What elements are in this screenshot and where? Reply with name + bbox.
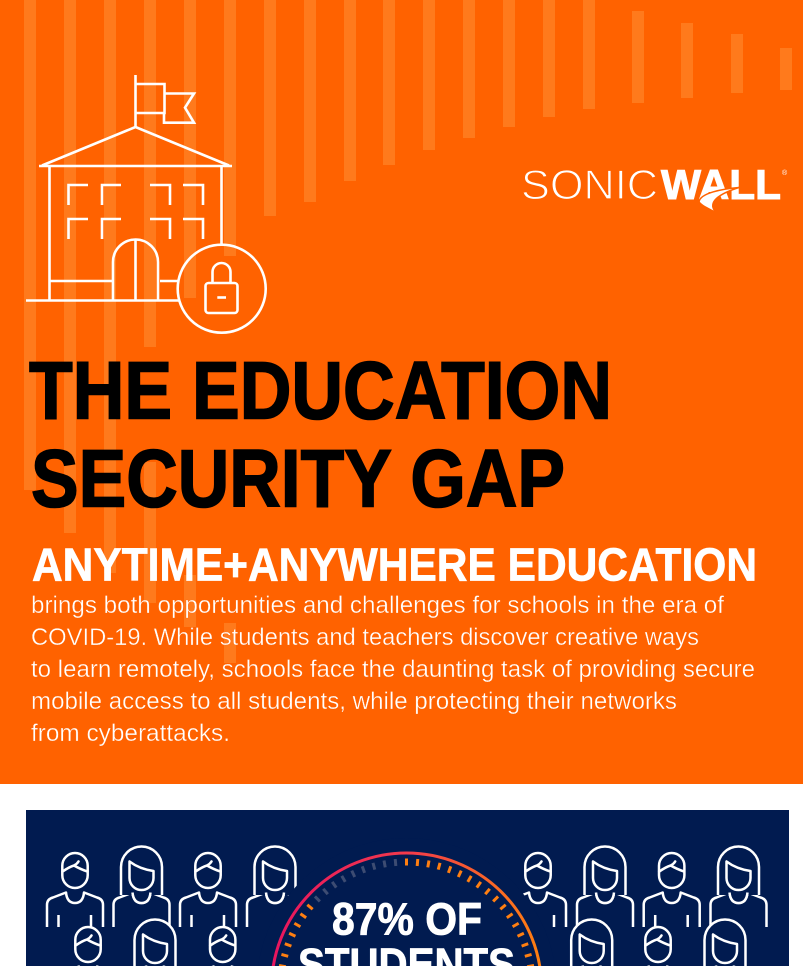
logo: SonicWall — [521, 161, 788, 212]
title — [29, 346, 612, 524]
logo: SonicWall: WALL — [661, 161, 781, 208]
intro text block: to learn remotely, schools face the daunting task of providing secure — [31, 656, 755, 683]
icon: school building with padlock — [26, 75, 266, 333]
intro text block: COVID-19. While students and teachers discover creative ways — [31, 624, 699, 651]
icons: students top row — [47, 847, 766, 927]
panel background — [26, 810, 789, 966]
circle backdrop — [288, 886, 524, 927]
decorative bars — [24, 0, 792, 663]
panel: navy student statistic — [26, 810, 789, 966]
icons: students second row — [60, 920, 753, 966]
logo: SonicWall: SONIC — [521, 161, 658, 208]
gauge ring — [272, 853, 542, 966]
statistic text — [300, 902, 514, 966]
title: SECURITY GAP — [31, 434, 565, 524]
intro text block: brings both opportunities and challenges for schools in the era of — [31, 592, 724, 619]
intro text block: mobile access to all students, while protecting their networks — [31, 688, 677, 715]
intro text block — [31, 592, 755, 747]
statistic text: 87% OF — [332, 894, 482, 944]
subheading: ANYTIME+ANYWHERE EDUCATION — [32, 538, 757, 590]
gauge ticks: 87 percent filled — [279, 858, 534, 966]
logo: SonicWall: ® — [782, 169, 788, 177]
intro text block: from cyberattacks. — [31, 720, 230, 747]
title: THE EDUCATION — [29, 346, 612, 436]
